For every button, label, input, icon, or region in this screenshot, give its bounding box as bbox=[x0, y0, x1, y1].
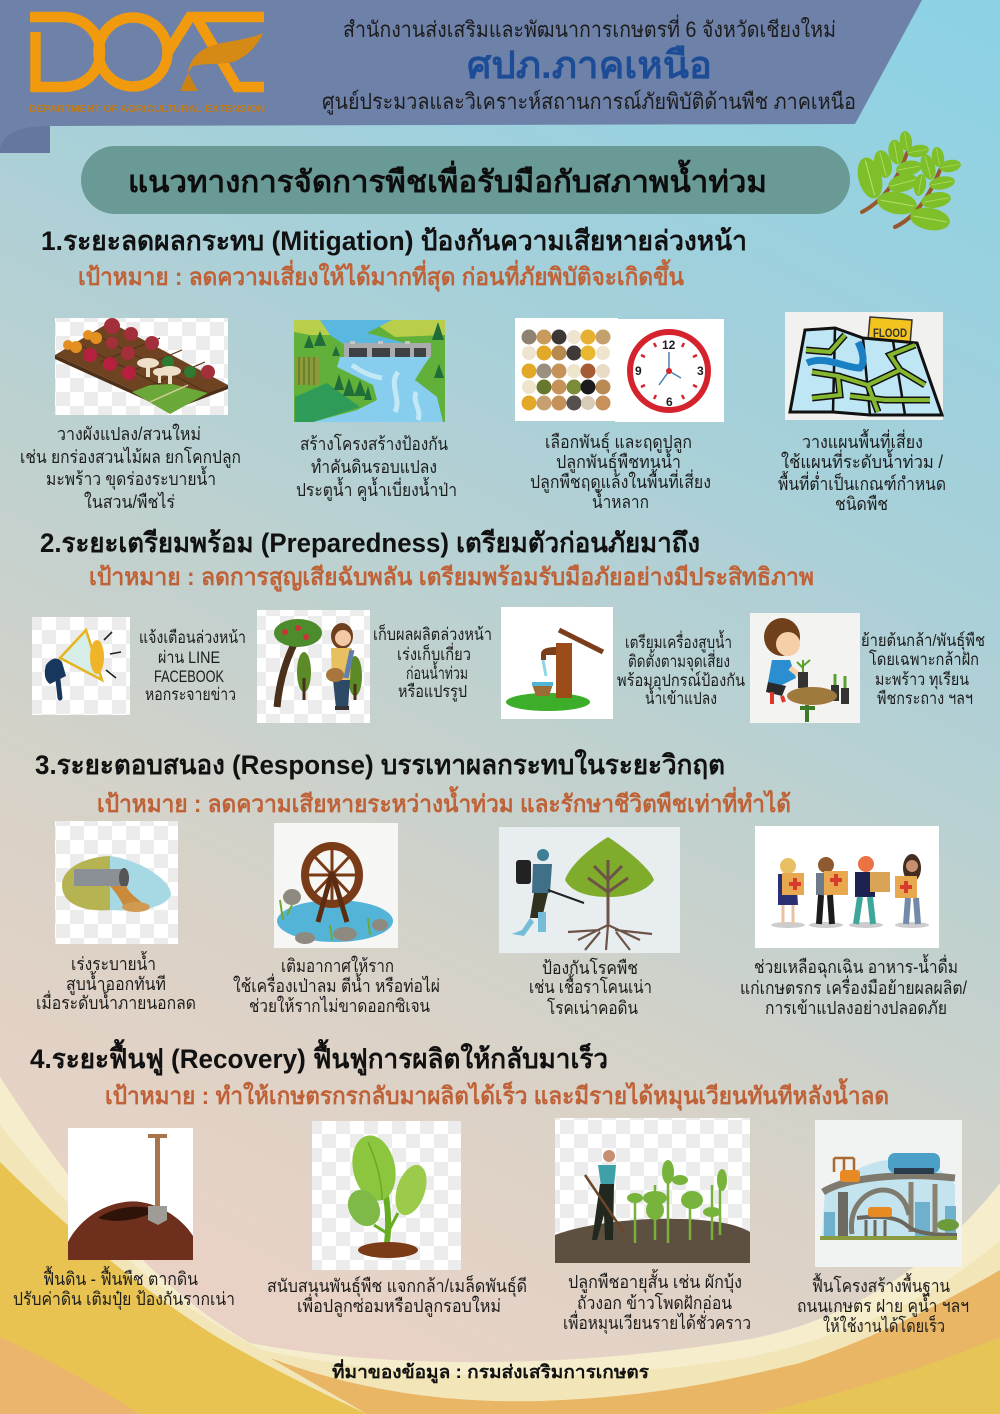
icon: boy moving seedlings bbox=[750, 613, 860, 723]
caption: seed support bbox=[267, 1274, 527, 1317]
icon: seeds and clock bbox=[515, 318, 724, 422]
office name: สำนักงานส่งเสริมและพัฒนาการเกษตรที่ 6 จังหวัดเชียงใหม่ bbox=[343, 14, 836, 42]
caption: seed and season: เลือกพันธุ์ และฤดูปลูก bbox=[545, 432, 692, 453]
caption: emergency aid: ช่วยเหลือฉุกเฉิน อาหาร-น้ำดื่ม bbox=[754, 954, 958, 978]
icon: shovel in soil bbox=[68, 1128, 193, 1260]
icon: seedling bbox=[312, 1121, 461, 1270]
caption: risk map: ชนิดพืช bbox=[835, 494, 888, 514]
bottom decorative waves bbox=[0, 1077, 1000, 1414]
caption: early warning: FACEBOOK bbox=[154, 667, 224, 686]
title pill bbox=[81, 146, 850, 214]
caption: short crops: ปลูกพืชอายุสั้น เช่น ผักบุ้ง bbox=[568, 1269, 742, 1293]
caption: risk map bbox=[778, 429, 946, 514]
caption: plot layout: มะพร้าว ขุดร่องระบายน้ำ bbox=[46, 466, 216, 490]
caption: water pumps: พร้อมอุปกรณ์ป้องกัน bbox=[617, 671, 745, 691]
logo caption: DEPARTMENT OF AGRICULTURAL EXTENSION bbox=[29, 104, 265, 115]
caption: add oxygen: เติมอากาศให้ราก bbox=[281, 955, 394, 976]
caption: early warning: ผ่าน LINE bbox=[158, 648, 220, 667]
caption: drain water: เร่งระบายน้ำ bbox=[71, 951, 156, 974]
caption: disease prevention bbox=[529, 957, 652, 1018]
caption: protective structures: สร้างโครงสร้างป้องกัน bbox=[300, 433, 448, 454]
icon: flood map: FLOOD bbox=[873, 326, 907, 340]
heading 4: 4.ระยะฟื้นฟู (Recovery) ฟื้นฟูการผลิตให้กลับมาเร็ว bbox=[30, 1038, 608, 1076]
caption: restore soil: ปรับค่าดิน เติมปุ๋ย ป้องกันรากเน่า bbox=[13, 1289, 235, 1310]
caption: water pumps: น้ำเข้าแปลง bbox=[645, 686, 717, 708]
caption: early warning: แจ้งเตือนล่วงหน้า bbox=[139, 628, 246, 647]
caption: risk map: พื้นที่ต่ำเป็นเกณฑ์กำหนด bbox=[778, 471, 946, 494]
caption: move seedlings: พืชกระถาง ฯลฯ bbox=[877, 689, 973, 708]
caption: early harvest: เก็บผลผลิตล่วงหน้า bbox=[373, 623, 492, 644]
caption: disease prevention: ป้องกันโรคพืช bbox=[542, 957, 638, 978]
centre full name: ศูนย์ประมวลและวิเคราะห์สถานการณ์ภัยพิบัติด้านพืช ภาคเหนือ bbox=[322, 89, 856, 115]
heading 1: 1.ระยะลดผลกระทบ (Mitigation) ป้องกันความเสียหายล่วงหน้า bbox=[41, 226, 747, 256]
caption: restore infrastructure: ถนนเกษตร ฝาย คูน้ำ ฯลฯ bbox=[797, 1293, 969, 1317]
caption: seed and season bbox=[530, 432, 711, 512]
caption: disease prevention: เช่น เชื้อราโคนเน่า bbox=[529, 974, 652, 997]
icon: harvesting woman bbox=[257, 610, 370, 723]
caption: risk map: ใช้แผนที่ระดับน้ำท่วม / bbox=[781, 449, 943, 472]
caption: add oxygen: ช่วยให้รากไม่ขาดออกซิเจน bbox=[249, 995, 430, 1016]
caption: drain water bbox=[36, 951, 196, 1013]
caption: restore soil bbox=[13, 1266, 235, 1310]
caption: protective structures: ประตูน้ำ คูน้ำเบี่ยงน้ำป่า bbox=[296, 477, 457, 501]
caption: short crops: เพื่อหมุนเวียนรายได้ชั่วคราว bbox=[563, 1310, 751, 1334]
caption: restore soil: ฟื้นดิน - ฟื้นพืช ตากดิน bbox=[43, 1266, 198, 1289]
caption: disease prevention: โรคเน่าคอดิน bbox=[547, 997, 638, 1018]
icon: volunteers with boxes bbox=[755, 826, 939, 948]
caption: seed support: เพื่อปลูกซ่อมหรือปลูกรอบใหม่ bbox=[297, 1293, 501, 1317]
icon: seeds and clock: 3 bbox=[697, 364, 704, 378]
icon: seeds and clock: 9 bbox=[635, 364, 642, 378]
caption: early harvest: ก่อนน้ำท่วม bbox=[406, 661, 468, 683]
caption: seed support: สนับสนุนพันธุ์พืช แจกกล้า/เมล็ดพันธุ์ดี bbox=[267, 1274, 527, 1297]
icon: water pump bbox=[501, 607, 613, 719]
DOAE logo bbox=[29, 17, 265, 115]
caption: plot layout: ในสวน/พืชไร่ bbox=[84, 491, 175, 512]
caption: early harvest: หรือแปรรูป bbox=[398, 682, 467, 702]
icon: farmer and crops bbox=[555, 1118, 750, 1263]
panel: section 1 mitigation bbox=[20, 226, 946, 514]
caption: restore infrastructure: ฟื้นโครงสร้างพื้นฐาน bbox=[812, 1273, 950, 1297]
caption: emergency aid: แก่เกษตรกร เครื่องมือย้ายผลผลิต/ bbox=[740, 975, 967, 998]
caption: early warning bbox=[139, 628, 246, 704]
header banner bbox=[0, 0, 922, 153]
icon: seeds and clock: 12 bbox=[662, 338, 676, 352]
caption: emergency aid: การเข้าแปลงอย่างปลอดภัย bbox=[765, 998, 947, 1018]
icon: megaphone bbox=[32, 617, 130, 715]
caption: short crops bbox=[563, 1269, 751, 1334]
goal 4: เป้าหมาย : ทำให้เกษตรกรกลับมาผลิตได้เร็ว และมีรายได้หมุนเวียนทันทีหลังน้ำลด bbox=[105, 1077, 889, 1112]
icon: road infrastructure bbox=[815, 1120, 962, 1267]
caption: seed and season: น้ำหลาก bbox=[592, 489, 649, 512]
goal 2: เป้าหมาย : ลดการสูญเสียฉับพลัน เตรียมพร้อมรับมือภัยอย่างมีประสิทธิภาพ bbox=[89, 564, 814, 592]
caption: water pumps: ติดตั้งตามจุดเสี่ยง bbox=[628, 649, 730, 672]
goal 3: เป้าหมาย : ลดความเสียหายระหว่างน้ำท่วม และรักษาชีวิตพืชเท่าที่ทำได้ bbox=[97, 785, 791, 818]
caption: move seedlings: โดยเฉพาะกล้าฝัก bbox=[869, 649, 979, 669]
caption: seed and season: ปลูกพันธุ์พืชทนน้ำ bbox=[556, 449, 681, 473]
caption: move seedlings: มะพร้าว ทุเรียน bbox=[875, 670, 969, 690]
caption: protective structures: ทำคันดินรอบแปลง bbox=[311, 457, 437, 477]
caption: risk map: วางแผนพื้นที่เสี่ยง bbox=[802, 429, 923, 452]
icon: leaf branches bbox=[853, 130, 962, 233]
heading 2: 2.ระยะเตรียมพร้อม (Preparedness) เตรียมตัวก่อนภัยมาถึง bbox=[40, 528, 700, 558]
source note: ที่มาของข้อมูล : กรมส่งเสริมการเกษตร bbox=[332, 1359, 649, 1384]
title text: แนวทางการจัดการพืชเพื่อรับมือกับสภาพน้ำท่วม bbox=[128, 159, 767, 199]
caption: plot layout bbox=[20, 423, 241, 512]
heading 3: 3.ระยะตอบสนอง (Response) บรรเทาผลกระทบในระยะวิกฤต bbox=[35, 749, 725, 780]
caption: protective structures bbox=[296, 433, 457, 501]
icon: drainage pipe bbox=[55, 821, 178, 944]
caption: restore infrastructure bbox=[797, 1273, 969, 1336]
goal 1: เป้าหมาย : ลดความเสี่ยงให้ได้มากที่สุด ก่อนที่ภัยพิบัติจะเกิดขึ้น bbox=[78, 258, 685, 293]
caption: restore infrastructure: ให้ใช้งานได้โดยเร็ว bbox=[823, 1314, 945, 1336]
caption: water pumps bbox=[617, 630, 745, 708]
icon: dam and river bbox=[294, 320, 445, 422]
panel: section 3 response bbox=[35, 749, 967, 1018]
caption: move seedlings bbox=[861, 631, 985, 708]
caption: drain water: สูบน้ำออกทันที bbox=[66, 971, 166, 995]
caption: add oxygen: ใช้เครื่องเป่าลม ตีน้ำ หรือท่อไผ่ bbox=[233, 973, 440, 996]
caption: add oxygen bbox=[233, 955, 440, 1016]
caption: plot layout: เช่น ยกร่องสวนไม้ผล ยกโคกปลูก bbox=[20, 446, 241, 468]
panel: section 2 preparedness bbox=[32, 528, 985, 723]
caption: drain water: เมื่อระดับน้ำภายนอกลด bbox=[36, 990, 196, 1013]
panel: section 4 recovery bbox=[13, 1038, 969, 1336]
caption: short crops: ถั่วงอก ข้าวโพดฝักอ่อน bbox=[577, 1290, 732, 1313]
icon: flood map bbox=[785, 312, 943, 420]
centre name: ศปภ.ภาคเหนือ bbox=[467, 45, 712, 87]
icon: sprayer and tree bbox=[499, 827, 680, 953]
icon: water wheel bbox=[274, 823, 398, 948]
caption: plot layout: วางผังแปลง/สวนใหม่ bbox=[57, 423, 201, 444]
icon: farm plots bbox=[55, 318, 228, 415]
caption: move seedlings: ย้ายต้นกล้า/พันธุ์พืช bbox=[861, 631, 985, 651]
caption: early warning: หอกระจายข่าว bbox=[145, 685, 236, 704]
icon: seeds and clock: 6 bbox=[666, 395, 673, 409]
caption: early harvest bbox=[373, 623, 492, 702]
caption: early harvest: เร่งเก็บเกี่ยว bbox=[397, 642, 471, 664]
caption: emergency aid bbox=[740, 954, 967, 1018]
caption: seed and season: ปลูกพืชฤดูแล้งในพื้นที่เสี่ยง bbox=[530, 469, 711, 493]
caption: water pumps: เตรียมเครื่องสูบน้ำ bbox=[625, 630, 732, 653]
